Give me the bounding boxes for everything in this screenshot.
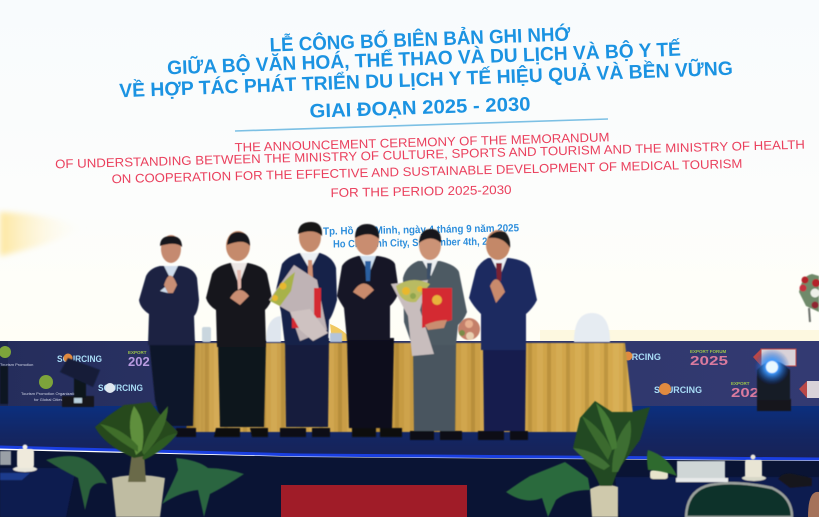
person 4 [337,224,402,437]
potted plant left [95,402,178,517]
red tag logos [753,349,819,398]
logo: tourism organization left: Tourism Promotion Organization [21,391,78,396]
palm plant right of pot [162,458,244,517]
stage light right [754,349,791,411]
logos: sourcing: SOURCING [654,385,702,396]
date and place text: Tp. Hồ Chí Minh, ngày 4 tháng 9 năm 2025 [323,222,519,238]
subtitle: English heading: ON COOPERATION FOR THE EFFECTIVE AND SUSTAINABLE DEVELOPMENT OF MEDICAL TOURISM [111,157,743,186]
left table with cup and folder [0,444,76,517]
flower arrangement at right edge [799,274,819,322]
person 3 bouquet and red folder [269,265,328,341]
divider line under title [235,119,608,131]
logos: export forum 2025: EXPORT [128,350,147,355]
title: Vietnamese heading: GIỮA BỘ VĂN HOÁ, THỂ THAO VÀ DU LỊCH VÀ BỘ Y TẾ [167,37,681,79]
stage front below LED strip [0,450,819,517]
audience member at right edge [808,492,819,517]
title: Vietnamese heading: LỄ CÔNG BỐ BIÊN BẢN GHI NHỚ [269,21,571,57]
LED screen background [0,0,819,342]
subtitle: English heading [55,130,805,200]
palm plant left of pot [46,456,107,510]
person 1 [139,235,199,437]
stage floor [0,406,819,459]
logos: sourcing: URCING [625,352,661,363]
person 3 [276,222,337,437]
chair [686,483,792,517]
logos: export forum 2025: EXPORT FORUM [690,349,727,354]
subtitle: English heading: THE ANNOUNCEMENT CEREMONY OF THE MEMORANDUM [234,130,610,155]
logos: export forum 2025 [128,349,759,400]
logos: sourcing: SOURCING [98,383,143,394]
date and place text [323,222,519,250]
logos: export forum 2025: EXPORT [731,381,750,386]
palm plant far right of stage [506,462,590,517]
people group [139,222,537,440]
red carpet [281,485,467,517]
person 6 [469,230,537,440]
title: Vietnamese heading: VỀ HỢP TÁC PHÁT TRIỂN DU LỊCH Y TẾ HIỆU QUẢ VÀ BỀN VỮNG [119,56,733,102]
logos: export forum 2025: 202 [128,354,150,369]
logo: tourism organization left [0,346,78,402]
logo: tourism organization left: for Global Cities [34,397,62,402]
logos: export forum 2025: 2025 [690,353,728,368]
table with gold skirt [186,313,635,432]
subtitle: English heading: OF UNDERSTANDING BETWEEN THE MINISTRY OF CULTURE, SPORTS AND TOURISM AND THE MINISTRY OF HEALTH [55,138,805,171]
stage light left [0,358,100,407]
person 2 [206,231,272,437]
logos: sourcing [57,352,702,396]
title: Vietnamese heading: GIAI ĐOẠN 2025 - 2030 [309,93,531,123]
potted plant right [573,401,677,517]
person 5 [403,229,467,440]
subtitle: English heading: FOR THE PERIOD 2025-2030 [330,183,512,200]
blue LED strip [0,447,819,459]
title: Vietnamese heading [119,21,733,123]
right table with name card, cup and chair [615,454,819,517]
logos: sourcing: SOURCING [57,354,102,365]
logo: tourism organization left: Tourism Promotion [0,362,33,367]
items on table [202,313,610,342]
logos: export forum 2025: 202 [731,385,759,400]
date and place text: Ho Chi Minh City, September 4th, 2025 [333,236,503,250]
backdrop wall with forum logos [0,341,819,408]
person 5 bouquet and red folder [391,280,452,356]
